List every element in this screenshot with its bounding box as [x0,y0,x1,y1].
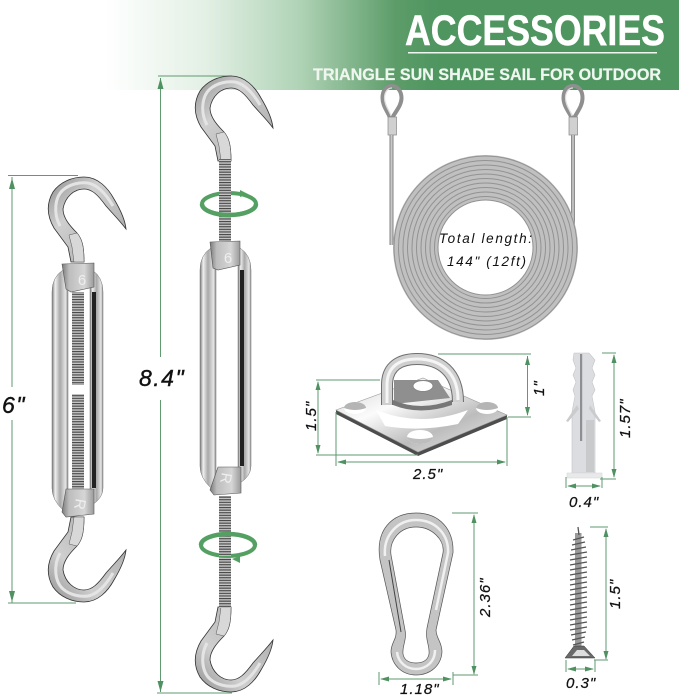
wood screw: 0.3" [566,675,596,692]
banner [105,0,679,90]
threaded rods [219,159,231,608]
dim lines [566,527,608,672]
dimension: 8.4 inch length [139,76,232,693]
pad eye plate: 1.5" [303,401,320,431]
bottom collar with R mark [210,467,241,495]
total length text: 144" (12ft) [447,254,526,269]
upper rotation ring back [202,193,256,215]
top collar with 6 mark: 6 [78,272,86,289]
threaded rods [72,292,84,489]
top collar with 6 mark: 6 [224,250,232,267]
dim labels: 1" [531,380,548,396]
dimension: 6 inch length [2,176,78,603]
bottom hook [195,607,273,692]
dimension: 8.4 inch length: 8.4" [139,365,185,391]
total length text: Total length: [439,231,532,246]
top hook [195,76,273,161]
pad eye plate: 2.5" [412,466,443,483]
long turnbuckle [195,76,273,692]
wall anchor plug [566,353,634,511]
bottom hook [48,517,126,602]
total length text [439,231,532,269]
wire rope coil [382,86,582,339]
dim lines [566,353,616,488]
coil rings [394,156,577,339]
top collar with 6 mark [210,241,240,270]
top hook [48,177,126,262]
short turnbuckle [48,177,126,602]
dim lines [379,513,478,685]
ring base [393,400,452,410]
wood screw [565,527,624,692]
frame [52,270,103,510]
dim labels: 1.57" [617,398,634,438]
bottom collar with R mark: R [70,497,89,511]
wall anchor plug: 0.4" [569,494,599,511]
rotation rings [201,190,256,563]
dim labels: 2.36" [477,577,494,618]
ring [387,359,458,405]
plate [336,378,507,456]
subtitle: TRIANGLE SUN SHADE SAIL FOR OUTDOOR [313,65,661,84]
dim lines [316,354,531,466]
right loop and ferrule [564,86,582,225]
frame [200,248,251,488]
left loop and ferrule [382,86,402,245]
dimension: 6 inch length: 6" [2,392,26,418]
top collar with 6 mark [62,263,94,292]
carabiner [379,513,494,697]
bottom collar with R mark: R [216,471,235,485]
bottom collar with R mark [62,489,94,517]
dim labels: 1.5" [607,579,624,609]
pad eye plate [303,354,548,483]
